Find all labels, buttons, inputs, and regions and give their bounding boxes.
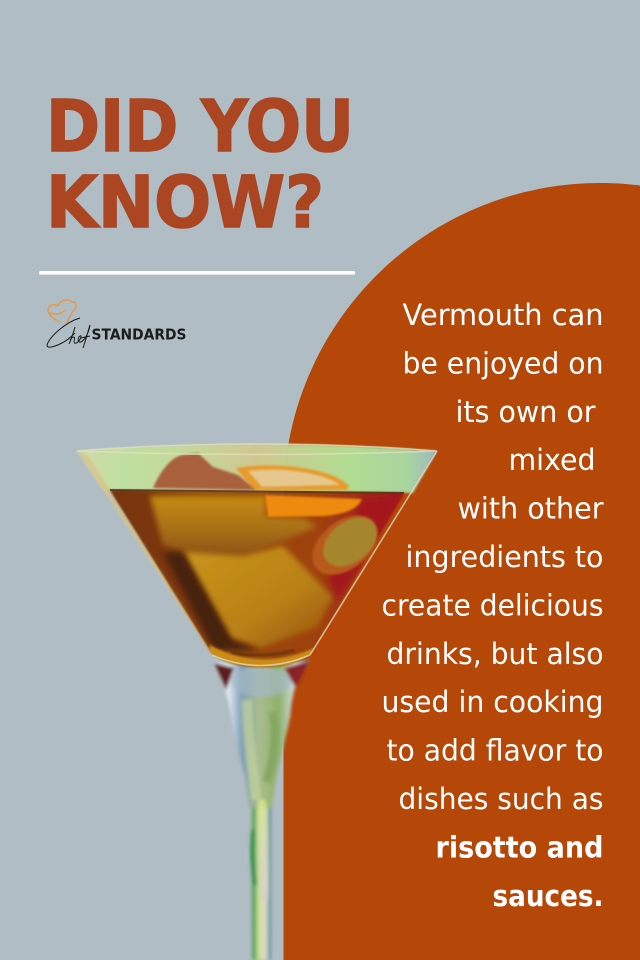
body text: risotto and <box>436 830 604 864</box>
body text: with other <box>458 492 604 526</box>
left dark region <box>112 491 210 648</box>
dark band <box>163 552 260 650</box>
title <box>46 85 354 244</box>
ice above liquid <box>153 453 256 490</box>
logo: Chef Standards <box>47 300 186 348</box>
body text: be enjoyed on <box>402 346 604 380</box>
orange slice <box>265 495 362 517</box>
upper ice cube <box>150 496 317 558</box>
script word Chef <box>47 318 90 348</box>
glass stem <box>213 660 310 960</box>
red right side <box>328 493 404 600</box>
body text: used in cooking <box>382 685 604 719</box>
big ice cube <box>183 546 333 648</box>
wordmark: STANDARDS <box>92 325 186 343</box>
title: KNOW? <box>46 161 324 244</box>
body text: its own or <box>456 395 596 429</box>
body text: Vermouth can <box>402 298 604 332</box>
martini glass <box>77 444 437 960</box>
body text: drinks, but also <box>386 637 604 671</box>
divider line <box>39 271 355 275</box>
lower liquid yellow <box>208 645 314 667</box>
liquid surface <box>110 490 404 493</box>
upper glass bowl above liquid <box>77 444 437 493</box>
icon: chef hat <box>48 300 76 323</box>
ice cubes and fruit <box>113 492 404 667</box>
body text: sauces. <box>492 879 604 913</box>
body text <box>382 298 604 913</box>
rim and side glass lines <box>77 444 437 666</box>
liquid <box>110 490 404 667</box>
body text: mixed <box>508 443 596 477</box>
olive <box>301 503 389 587</box>
body text: dishes such as <box>398 782 604 816</box>
body text: create delicious <box>382 588 604 622</box>
panel: orange arched shape <box>284 183 640 960</box>
title: DID YOU <box>46 85 354 168</box>
body text: to add flavor to <box>386 734 604 768</box>
glass wall between rim and liquid <box>77 451 216 655</box>
body text: ingredients to <box>406 540 604 574</box>
